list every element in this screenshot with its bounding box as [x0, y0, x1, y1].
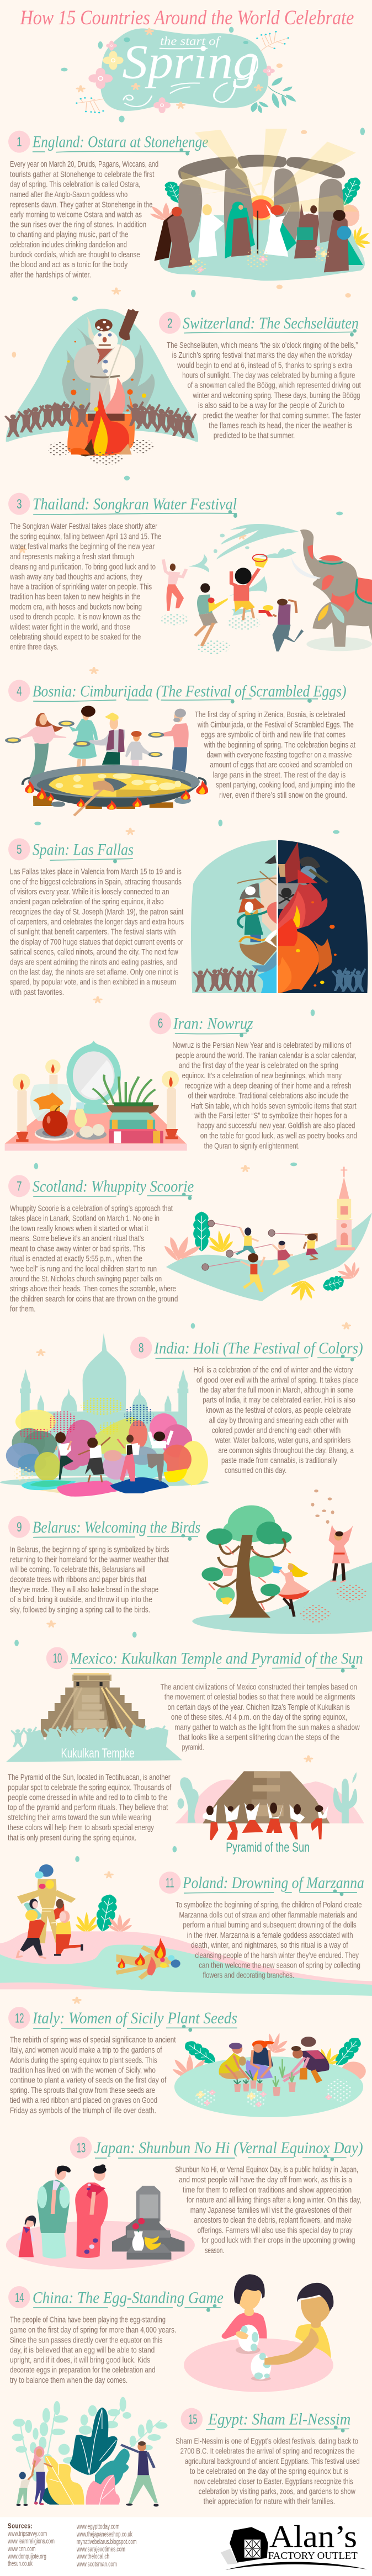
heading 1: England: Ostara at Stonehenge [32, 133, 208, 151]
text block 1: represents dawn. They gather at Stonehenge in the [10, 199, 152, 209]
sources list: Sources: [8, 2522, 33, 2530]
text block 7: strings above their heads. Then comes the scramble, where [10, 1284, 176, 1293]
number badge 10: 10 [53, 1651, 62, 1666]
sources list: www.learnreligions.com [8, 2537, 55, 2545]
text block 6 [172, 1040, 357, 1151]
number badge 10 [46, 1647, 68, 1669]
section 2: Switzerland [4, 309, 361, 465]
section 5: Spain [8, 838, 368, 997]
illustration: women planting seeds [173, 2029, 366, 2117]
text block 1: to chanting and playing music, part of the [10, 230, 129, 239]
text block 5: Las Fallas takes place in Valencia from March 15 to 19 and is [10, 867, 182, 876]
number badge 1: 1 [17, 134, 22, 149]
number badge 2: 2 [167, 316, 172, 331]
text block 10a [161, 1682, 360, 1752]
text block 1: named after the Anglo-Saxon goddess who [10, 189, 127, 199]
text block 3: the spring equinox, falling between April 13 and 15. The [10, 531, 161, 541]
heading 5: Spain: Las Fallas [33, 840, 134, 858]
heading 14: China: The Egg-Standing Game [33, 2289, 224, 2307]
sources list [8, 2522, 137, 2568]
number badge 6: 6 [158, 1016, 163, 1031]
text block 3: tradition has been taken to new heights in the [10, 592, 140, 601]
number badge 8: 8 [139, 1340, 144, 1355]
text block 11 [176, 1900, 362, 1980]
section 7: Scotland [8, 1167, 372, 1313]
heading 12: Italy: Women of Sicily Plant Seeds [32, 2009, 237, 2027]
text block 12: spring. The sprouts that grow from these seeds are [10, 2085, 155, 2095]
heading 3: Thailand: Songkran Water Festival [33, 495, 237, 513]
text block 2: predicted to be that summer. [214, 431, 295, 440]
text block 5: of carpenters, and celebrates the longer days and extra hours [10, 917, 184, 926]
text block 5: ancient pagan celebration of the spring equinox, it also [10, 897, 164, 906]
text block 3: modern era, with hoses and buckets now being [10, 602, 142, 611]
logo: Alan's Factory Outlet [221, 2520, 368, 2570]
number badge 15: 15 [189, 2411, 197, 2426]
heading 7: Scotland: Whuppity Scoorie [33, 1177, 194, 1195]
section 12: Italy [8, 2007, 366, 2117]
text block 5: of sunlight that benefit carpenters. The festival starts with [10, 927, 176, 936]
number badge 7: 7 [17, 1179, 22, 1194]
text block 8 [193, 1365, 358, 1475]
section 9: Belarus [8, 1490, 372, 1634]
text block 12: Adonis during the spring equinox to plant seeds. This [10, 2055, 157, 2065]
heading 6: Iran: Nowruz [173, 1014, 253, 1032]
text block 5: with past favorites. [9, 987, 64, 997]
text block 3: and represents making a fresh start through [10, 552, 134, 561]
sources list: www.thejapaneseshop.co.uk [76, 2530, 132, 2538]
text block 7: means. Some believe it’s an ancient ritual that’s [10, 1233, 144, 1243]
text block 3: have a tradition of sprinkling water on people. This [10, 581, 152, 591]
illustration: Böögg snowman bonfire [4, 309, 198, 465]
number badge 12: 12 [15, 2011, 24, 2026]
text block 7 [10, 1204, 178, 1313]
text block 14: try to balance them when the day comes. [10, 2375, 127, 2384]
sources list: thesun.co.uk [8, 2559, 33, 2568]
sources list: www.thelocal.ch [76, 2552, 109, 2561]
text block 10b: The Pyramid of the Sun, located in Teotihuacan, is another [8, 1772, 171, 1782]
number badge 9 [8, 1516, 30, 1538]
number badge 11: 11 [166, 1875, 174, 1890]
text block 15 [176, 2436, 360, 2506]
number badge 5: 5 [17, 842, 22, 857]
illustration: children swinging balls by the church [161, 1167, 372, 1303]
text block 9: of a bird, bring it outside, and throw it up into the [10, 1594, 152, 1604]
section 11: Poland [0, 1864, 372, 1996]
text block 7: takes place in Lanark, Scotland on March 1. No one in [10, 1213, 160, 1223]
section 15: Egypt [12, 2397, 360, 2506]
text block 11: flowers and decorating branches. [203, 1970, 294, 1980]
text block 14: The people of China have been playing the egg-standing [10, 2315, 166, 2324]
text block 7: the town really knows when it started or what it [10, 1223, 148, 1233]
text block 8: consumed on this day. [225, 1465, 286, 1475]
text block 5: of visitors every year. While it is loosely connected to an [10, 887, 169, 896]
text block 5: recognizes the day of St. Joseph (March 19), the patron saint [10, 907, 183, 916]
text block 1: day of spring. This celebration is called Ostara, [10, 179, 140, 189]
text block 12: Italy, and women would make a trip to the gardens of [10, 2045, 162, 2054]
number badge 2 [159, 312, 181, 334]
illustration: Pyramid of the Sun: Pyramid of the Sun [226, 1840, 310, 1854]
text block 3 [9, 521, 161, 651]
text block 7: for them. [10, 1303, 35, 1313]
heading 12 [32, 2009, 237, 2032]
text block 7: ritual is enacted at exactly 5:55 p.m., when the [10, 1254, 142, 1263]
text block 12: tradition has lived on with the women of Sicily, who [10, 2065, 156, 2075]
illustration: Kukulkan temple: Kukulkan Tempke [61, 1746, 135, 1761]
illustration: Haft Sin table [5, 1041, 187, 1151]
hero: the start of Spring: Spring [122, 35, 259, 89]
heading 3 [33, 495, 237, 518]
heading 14 [33, 2289, 224, 2312]
text block 1: burdock cordials, which are thought to cleanse [10, 250, 140, 259]
text block 5: spared, by popular vote, and is then exhibited in a museum [10, 977, 176, 987]
sources list: www.egypttoday.com [76, 2522, 119, 2531]
section 14: China [8, 2274, 333, 2392]
text block 7: “wee bell” is rung and the local children start to run [10, 1264, 157, 1273]
number badge 13: 13 [77, 2140, 86, 2155]
number badge 3: 3 [17, 496, 22, 511]
illustration: Marzanna dolls and river [0, 1864, 372, 1996]
heading 5 [33, 840, 134, 863]
text block 10b: popular spot to celebrate the spring equinox. Thousands of [8, 1782, 171, 1792]
heading 9 [33, 1518, 200, 1541]
text block 7: the children search for coins that are thrown on the ground [10, 1294, 178, 1303]
number badge 5 [8, 838, 30, 860]
footer [0, 2517, 372, 2576]
text block 12 [10, 2035, 176, 2115]
scattered petals and stars [12, 27, 365, 2004]
section 8: India [0, 1333, 363, 1497]
number badge 8 [130, 1337, 152, 1359]
illustration: family among plants [12, 2397, 167, 2506]
text block 5: one of the biggest celebrations in Spain, attracting thousands [10, 877, 182, 886]
text block 14: Since the sun passes directly over the equator on this [10, 2335, 163, 2345]
text block 5: on the last day, the ninots are set aflame. Only one ninot is [10, 967, 178, 977]
text block 9: returning to their homeland for the warmer weather that [10, 1554, 169, 1564]
number badge 14: 14 [15, 2290, 24, 2305]
text block 3: wildest water fight in the world, and those [9, 622, 130, 632]
text block 14: game on the first day of spring for more than 4,000 years. [10, 2325, 176, 2334]
number badge 12 [8, 2007, 30, 2029]
text block 10b: these colors will help them to absorb special energy [8, 1822, 154, 1832]
number badge 4: 4 [17, 683, 22, 698]
illustration: Pyramid of the Sun [175, 1771, 364, 1854]
text block 2 [167, 340, 361, 440]
text block 12: tied with a red ribbon and placed on graves on Good [10, 2095, 157, 2105]
text block 9: they’ve made. They will also bake bread in the shape [10, 1584, 158, 1594]
text block 5: the display of 700 huge statues that depict current events or [10, 937, 183, 946]
number badge 7 [8, 1175, 30, 1197]
illustration: Kukulkan temple [6, 1673, 182, 1762]
text block 4 [195, 709, 355, 799]
text block 7: around the St. Nicholas church swinging paper balls on [10, 1274, 162, 1283]
heading 1 [32, 133, 208, 156]
illustration: scrambled egg feast [5, 706, 208, 815]
text block 10b: people come dressed in white and red to to climb to the [8, 1792, 167, 1802]
footer: mynativebelarus.blogspot.com [77, 2538, 137, 2546]
illustration: tree with paper birds [192, 1490, 372, 1634]
sources list: www.scotsman.com [76, 2560, 117, 2568]
sources list: www.sarajevotimes.com [76, 2545, 125, 2553]
illustration: ninot before and after burning [191, 840, 368, 993]
text block 5: satirical scenes, called ninots, around the city. The next few [10, 947, 178, 956]
section 4: Bosnia [5, 680, 355, 815]
text block 14: upright, and if it does, it will bring good luck. Kids [10, 2355, 150, 2365]
text block 9 [9, 1544, 169, 1614]
number badge 4 [8, 680, 30, 702]
illustration: Taj Mahal and Holi colours [0, 1333, 209, 1497]
text block 12: Friday as symbols of the triumph of life over death. [10, 2105, 156, 2115]
text block 3: water festival marks the beginning of the new year [9, 542, 155, 551]
illustration: Stonehenge [150, 129, 372, 280]
section 1: England [8, 129, 372, 280]
text block 14 [10, 2315, 176, 2384]
illustration: family at gravestone [6, 2164, 195, 2270]
text block 13: season. [205, 2245, 224, 2255]
heading 7 [33, 1177, 194, 1200]
text block 3: entire three days. [10, 642, 59, 651]
number badge 15 [181, 2408, 203, 2430]
text block 1: tourists gather at Stonehenge to celebrate the first [10, 169, 155, 179]
text block 1: the sun rises over the ring of stones. In addition [10, 219, 146, 229]
number badge 11 [159, 1872, 181, 1894]
illustration: elephant and water fight [161, 524, 372, 654]
text block 1: early morning to welcome Ostara and watch as [10, 210, 142, 219]
text block 1: celebration includes drinking dandelion and [10, 240, 127, 249]
text block 3: The Songkran Water Festival takes place shortly after [10, 521, 157, 531]
text block 9: sky, followed by singing a spring call to the birds. [10, 1604, 150, 1614]
text block 1: after the hardships of winter. [10, 269, 91, 279]
text block 3: cleansing and purification. To bring good luck and to [10, 561, 156, 571]
text block 1: the blood and act as a tonic for the body [10, 259, 127, 269]
text block 3: used to drench people. It is now known as the [10, 612, 141, 621]
text block 10a: pyramid. [182, 1742, 204, 1752]
sources list: www.tripsavvy.com [8, 2530, 47, 2538]
text block 1: Every year on March 20, Druids, Pagans, Wiccans, and [10, 159, 158, 168]
heading 9: Belarus: Welcoming the Birds [33, 1518, 200, 1536]
section 13: Japan [6, 2137, 363, 2270]
text block 7: Whuppity Scoorie is a celebration of spring’s approach that [10, 1204, 173, 1213]
text block 14: decorate eggs in preparation for the celebration and [10, 2365, 156, 2374]
text block 7: meant to chase away winter or bad spirits. This [10, 1243, 145, 1253]
text block 9: will be coming. To celebrate this, Belarusians will [9, 1564, 145, 1574]
number badge 14 [8, 2286, 30, 2308]
text block 3: wash away any bad thoughts and actions, they [9, 571, 142, 581]
text block 10b: top of the pyramid and perform rituals. They believe that [8, 1803, 168, 1812]
section 6: Iran [5, 1012, 357, 1151]
text block 5 [9, 867, 184, 997]
sources list: www.donquijote.org [8, 2552, 46, 2561]
section 10: Mexico [6, 1647, 363, 1762]
text block 13 [175, 2165, 362, 2255]
text block 6: the Quran to signify enlightenment. [204, 1141, 300, 1151]
text block 9: decorate trees with ribbons and paper birds that [10, 1575, 146, 1584]
number badge 6 [150, 1012, 171, 1034]
illustration: children standing eggs [184, 2274, 333, 2392]
text block 14: day, it is believed that an egg will be able to stand [10, 2345, 155, 2355]
text block 1 [10, 159, 158, 279]
logo: Alan's Factory Outlet: Alan’s [269, 2520, 357, 2554]
text block 10b [8, 1772, 171, 1842]
number badge 3 [8, 493, 30, 515]
text block 12: continue to plant a variety of seeds on the first day of [10, 2075, 166, 2085]
text block 12: The rebirth of spring was of special significance to ancient [10, 2035, 176, 2044]
hero: the start of Spring: the start of [160, 35, 221, 48]
text block 10b: stretching their arms toward the sun while wearing [8, 1812, 151, 1822]
sources list: www.cnn.com [8, 2545, 35, 2553]
number badge 9: 9 [17, 1519, 22, 1534]
number badge 13 [70, 2137, 92, 2159]
text block 10b: that is only present during the spring equinox. [8, 1832, 136, 1842]
number badge 1 [8, 131, 30, 153]
heading 6 [173, 1014, 253, 1037]
text block 3: celebrating should expect to be soaked for the [10, 632, 141, 642]
text block 5: days are spent admiring the ninots and eating pastries, and [10, 957, 177, 967]
text block 9: In Belarus, the beginning of spring is symbolized by birds [10, 1544, 169, 1554]
hero: the start of Spring [76, 28, 296, 113]
section 3: Thailand [8, 493, 372, 654]
